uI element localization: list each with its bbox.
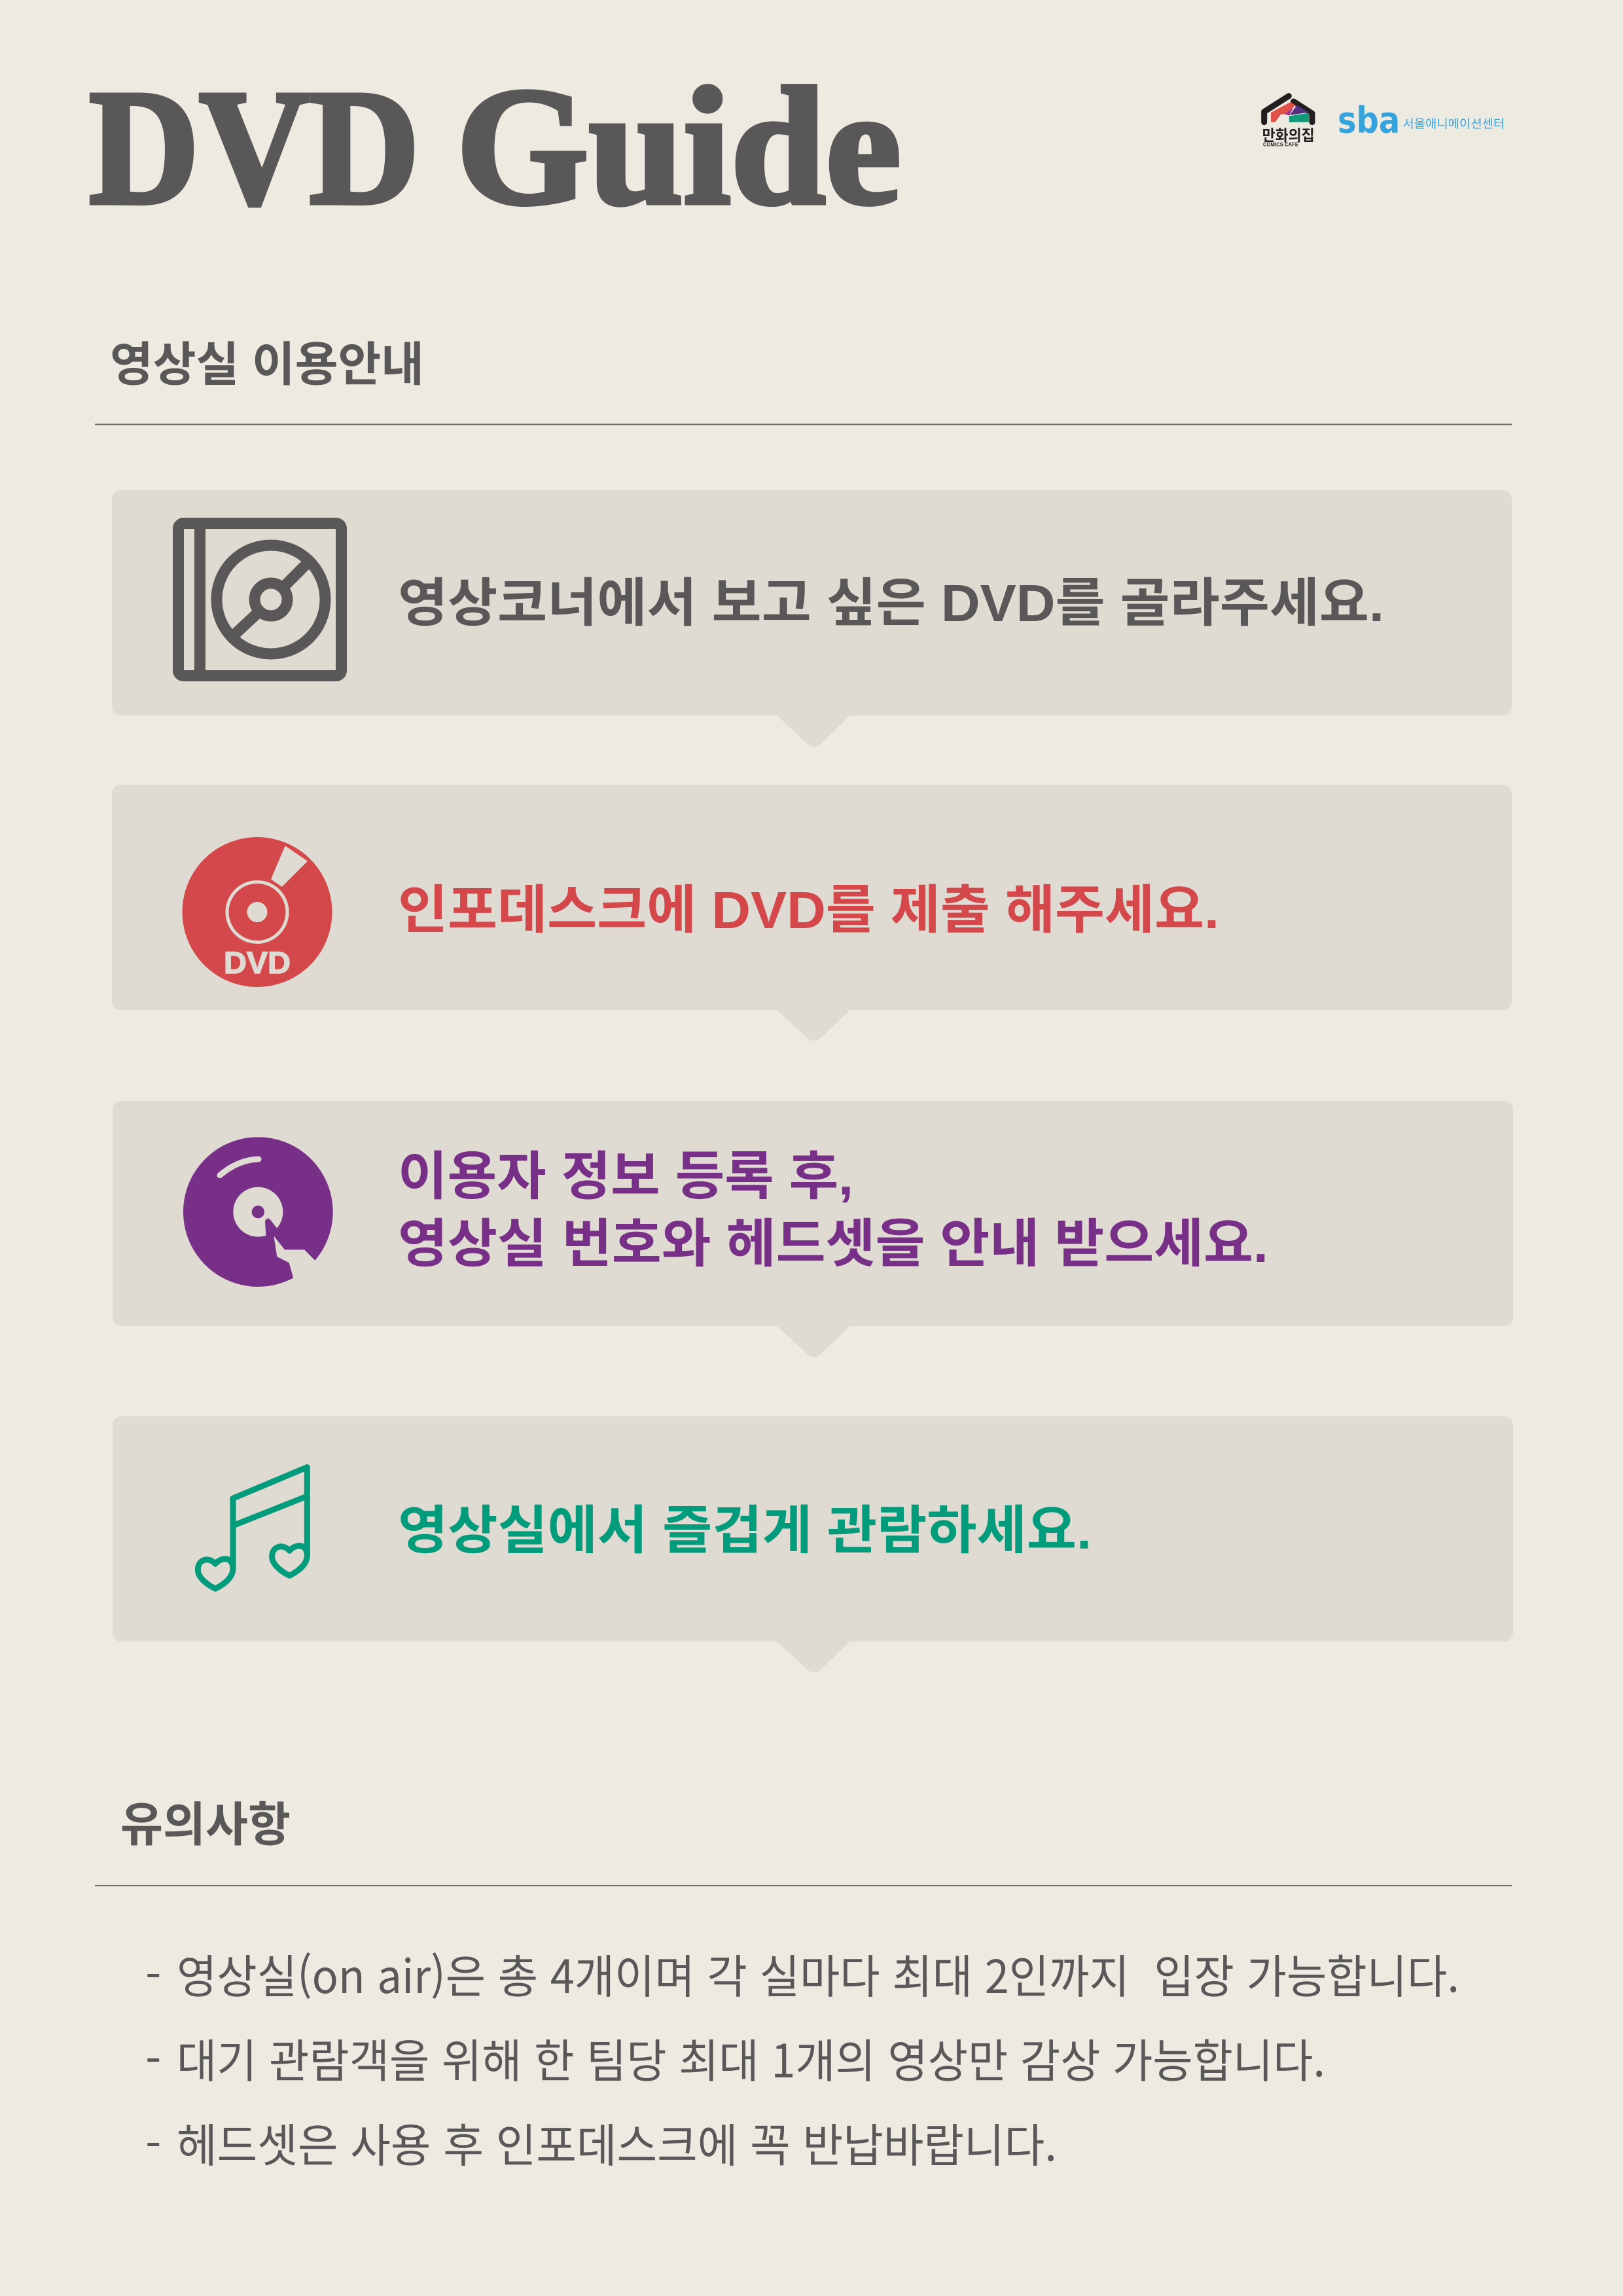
panel: step 4	[113, 1416, 1513, 1673]
logo: sba: 서울애니메이션센터	[1402, 117, 1505, 130]
icon: red dvd disc: DVD	[224, 945, 291, 980]
icon: red dvd disc	[182, 837, 332, 987]
panel: step 3	[113, 1101, 1513, 1357]
notes list: -	[145, 2025, 161, 2091]
notes list: 영상실(on air)은 총 4개이며 각 실마다 최대 2인까지 입장 가능합니다.	[177, 1941, 1459, 2007]
title: Guide	[456, 53, 901, 240]
step 4 text: 영상실에서 즐겁게 관람하세요.	[398, 1501, 1092, 1560]
logo: sba: sba	[1338, 99, 1400, 141]
logo: comics cafe	[1262, 96, 1315, 147]
notes list: 헤드셋은 사용 후 인포데스크에 꼭 반납바랍니다.	[177, 2109, 1057, 2176]
heading: room guide: 영상실 이용안내	[110, 339, 424, 391]
notes list: -	[145, 1941, 161, 2007]
heading: notes: 유의사항	[120, 1799, 291, 1852]
panel: step 1	[112, 490, 1512, 747]
icon: dvd case	[178, 520, 342, 679]
notes list: -	[145, 2109, 161, 2176]
panel: step 2	[112, 785, 1512, 1041]
step 3 text: 영상실 번호와 헤드셋을 안내 받으세요.	[398, 1215, 1268, 1273]
notes list	[145, 1941, 1459, 2176]
step 2 text: 인포데스크에 DVD를 제출 해주세요.	[398, 881, 1219, 939]
step 1 text: 영상코너에서 보고 싶은 DVD를 골라주세요.	[398, 574, 1384, 632]
icon: purple vinyl disc	[183, 1137, 342, 1294]
notes list: 대기 관람객을 위해 한 팀당 최대 1개의 영상만 감상 가능합니다.	[177, 2025, 1325, 2091]
step 3 text: 이용자 정보 등록 후,	[398, 1147, 853, 1206]
step 3 text	[398, 1147, 1268, 1273]
logo: comics cafe: COMICS CAFE	[1263, 141, 1299, 147]
title: DVD	[89, 56, 419, 239]
title	[89, 53, 901, 240]
icon: music note with hearts	[198, 1467, 307, 1588]
logo: comics cafe: 만화의집	[1262, 127, 1315, 144]
logo: sba	[1338, 99, 1505, 141]
